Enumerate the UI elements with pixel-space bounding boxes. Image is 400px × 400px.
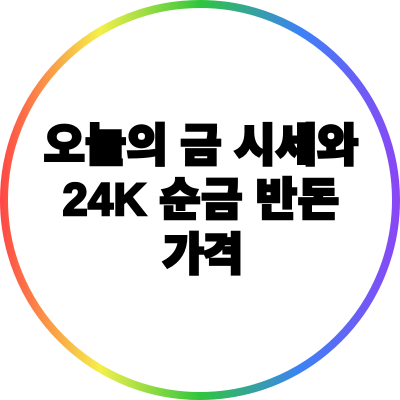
title xyxy=(44,120,359,280)
title line 1: 오늘의 금 시세와 xyxy=(44,120,358,171)
title line 2: 24K 순금 반돈 xyxy=(63,174,339,225)
title line 3: 가격 xyxy=(163,229,241,280)
